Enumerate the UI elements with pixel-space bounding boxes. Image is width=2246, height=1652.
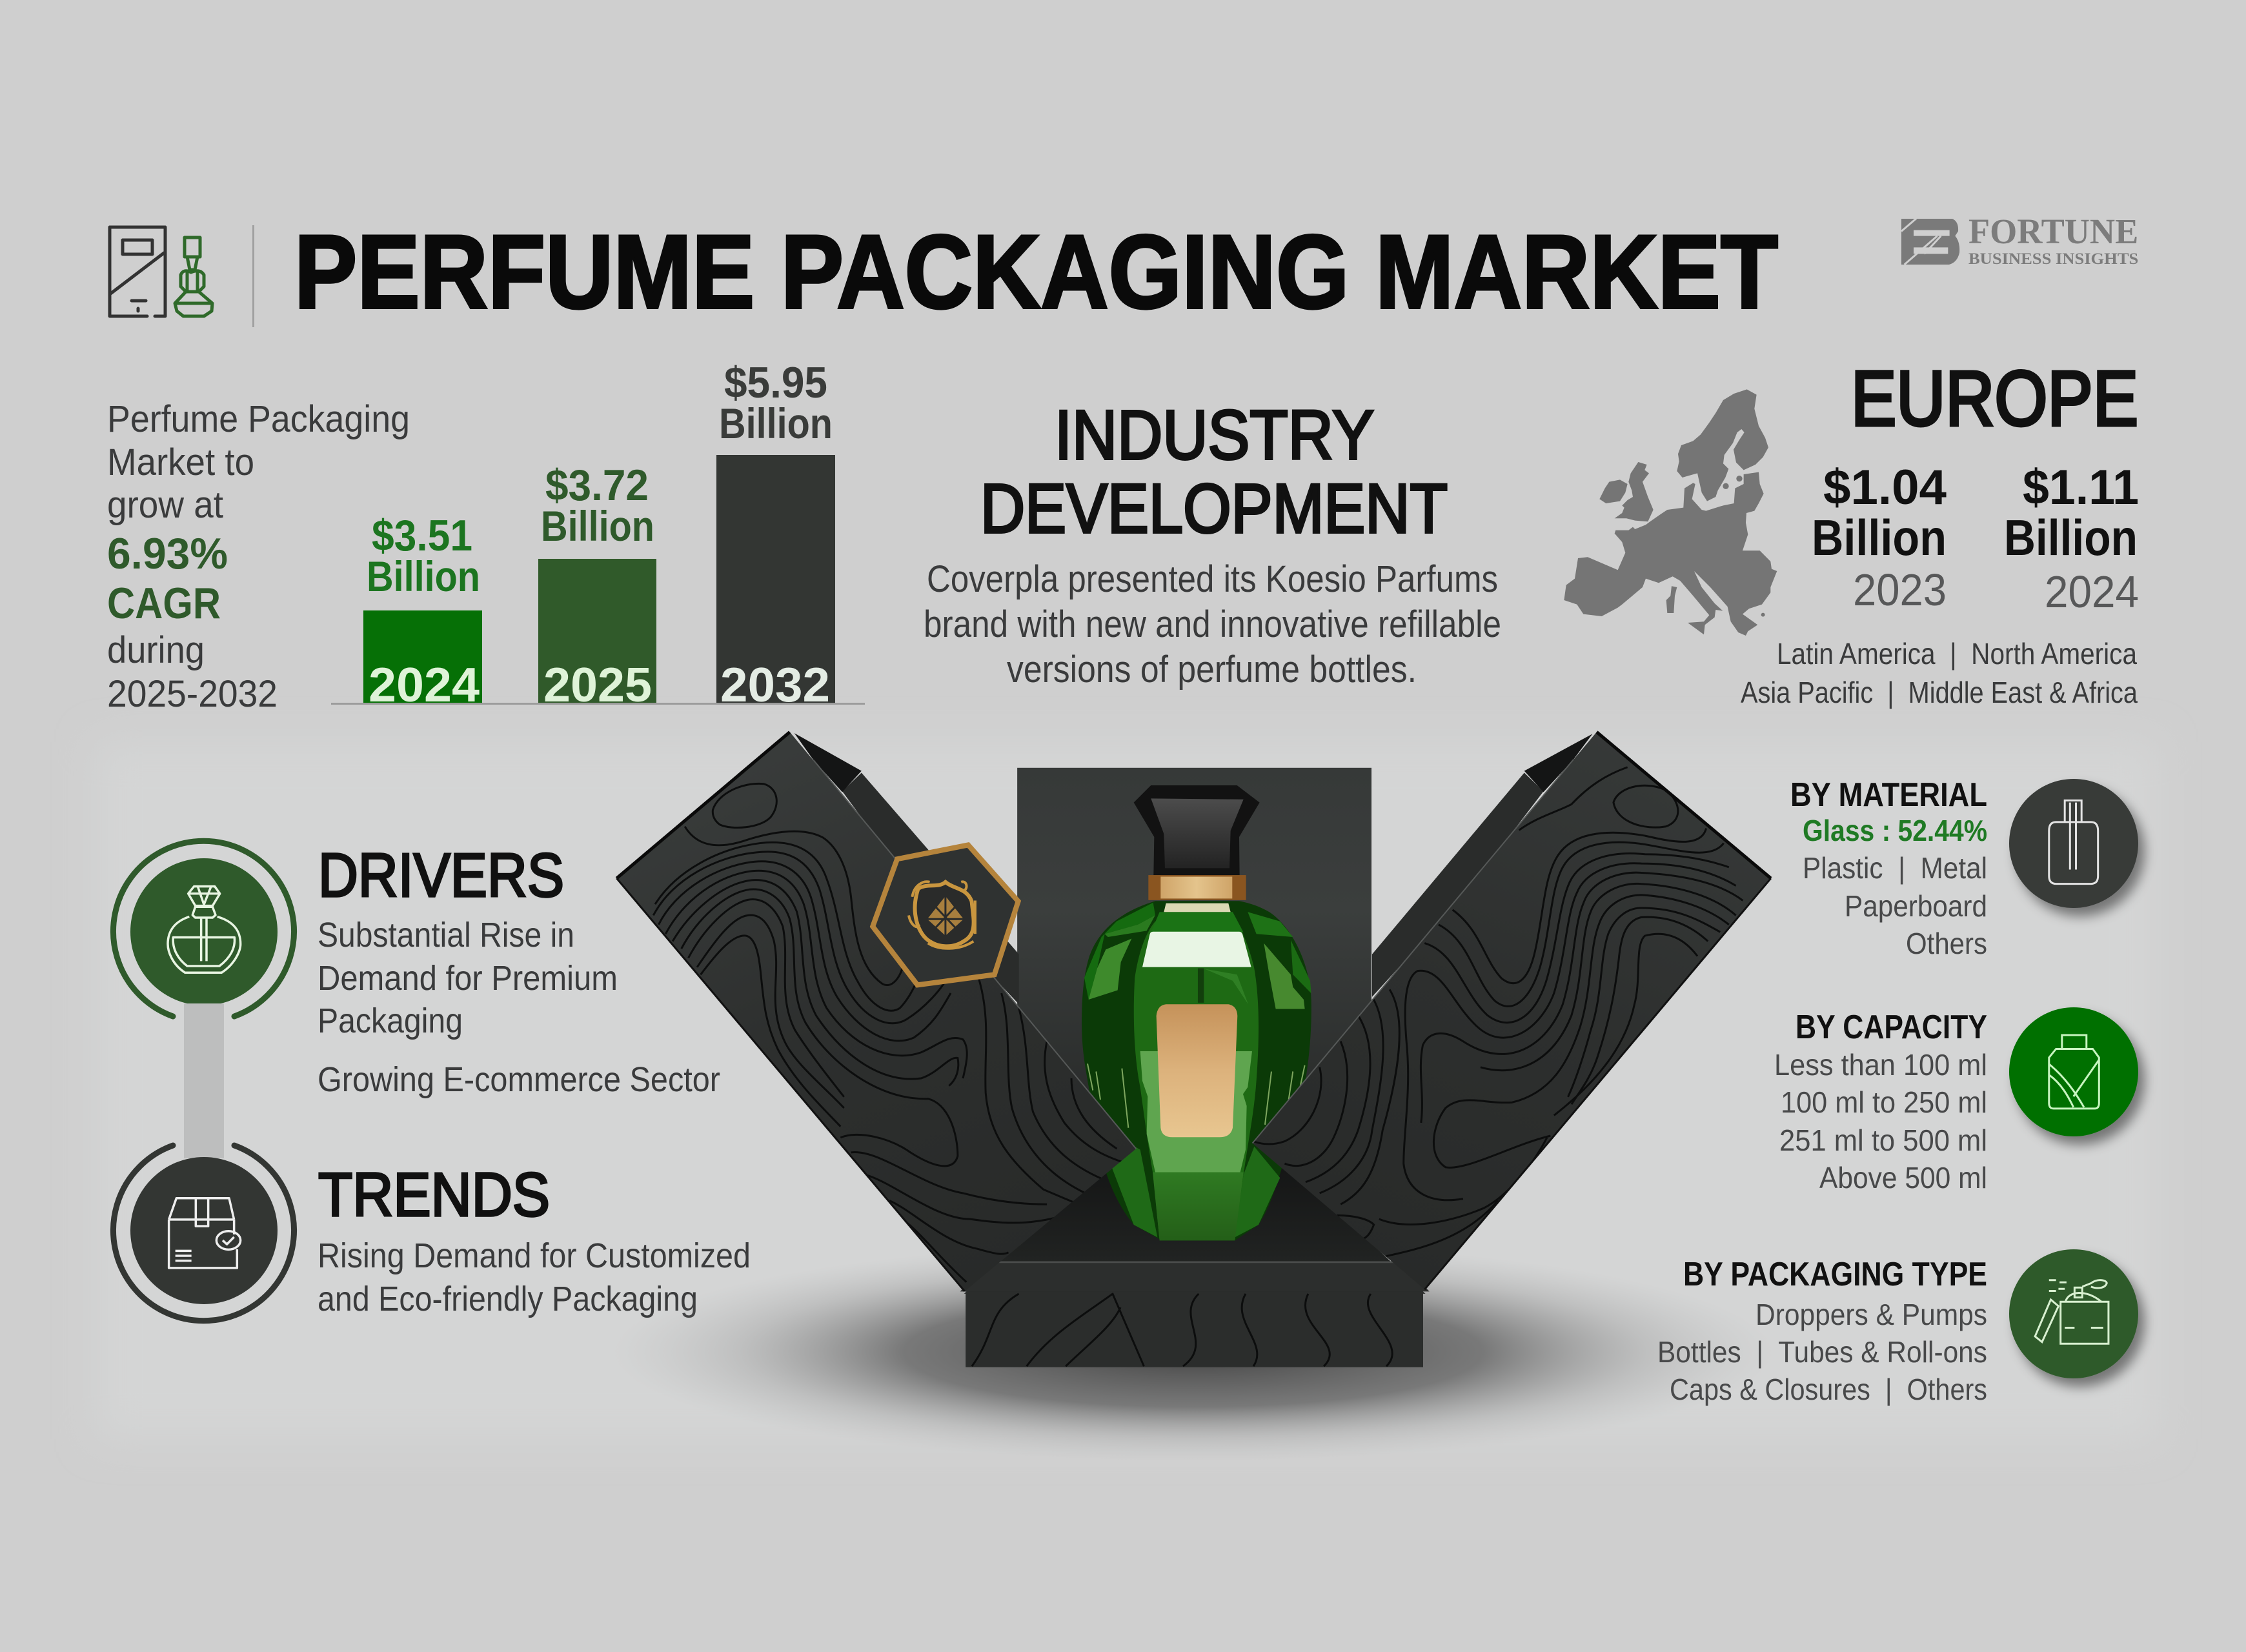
industry development text: versions of perfume bottles. [1007, 649, 1417, 690]
infographic canvas [108, 219, 2151, 1448]
CAGR text block [107, 398, 410, 715]
box base [966, 1291, 1423, 1367]
by capacity: Above 500 ml [1819, 1161, 1987, 1194]
by packaging type: BY PACKAGING TYPE [1683, 1256, 1987, 1293]
by capacity: 100 ml to 250 ml [1781, 1085, 1987, 1119]
bar 2025: Billion [541, 502, 654, 550]
europe value 2024: Billion [2004, 509, 2138, 566]
trends icon [114, 1145, 294, 1321]
icon: capacity bottle [2009, 1007, 2138, 1136]
bottle [1082, 785, 1311, 1240]
title: PERFUME PACKAGING MARKET [294, 214, 1778, 330]
europe value 2023: Billion [1812, 509, 1947, 566]
by capacity [1774, 1009, 1987, 1194]
by material: Glass : 52.44% [1803, 814, 1987, 847]
CAGR text block: 6.93% [107, 529, 228, 578]
industry development heading [980, 396, 1448, 547]
bar 2024: 2024 [369, 658, 480, 712]
by material [1790, 776, 1987, 960]
by packaging type: Bottles | Tubes & Roll-ons [1657, 1335, 1987, 1369]
by packaging type: Caps & Closures | Others [1670, 1373, 1987, 1406]
gold label [1157, 1004, 1237, 1137]
by packaging type [1657, 1256, 1987, 1406]
CAGR text block: Market to [107, 441, 254, 483]
drivers text: Growing E-commerce Sector [318, 1060, 720, 1099]
drivers text: Substantial Rise in [318, 916, 574, 954]
bar 2024: $3.51 [372, 511, 472, 560]
drivers text [318, 841, 720, 1099]
industry development text: brand with new and innovative refillable [924, 603, 1501, 645]
trends text: TRENDS [318, 1160, 550, 1229]
logo: Fortune Business Insights: BUSINESS INSIGHTS [1968, 250, 2138, 268]
by capacity: 251 ml to 500 ml [1779, 1123, 1987, 1157]
by material: BY MATERIAL [1790, 776, 1987, 814]
europe value 2023 [1812, 460, 1947, 615]
header icon: box and perfume bottle [110, 227, 212, 316]
by material: Plastic | Metal [1803, 851, 1987, 885]
header divider [252, 225, 254, 327]
industry development text: Coverpla presented its Koesio Parfums [927, 558, 1498, 600]
hexagon badge [873, 845, 1018, 985]
bar 2025: 2025 [543, 658, 652, 712]
europe value 2024: $1.11 [2023, 460, 2139, 515]
industry development heading: INDUSTRY [1055, 396, 1374, 474]
europe value 2024: 2024 [2045, 567, 2139, 617]
CAGR text block: during [107, 629, 205, 671]
by material: Others [1906, 927, 1987, 960]
perfume box with bottle [616, 732, 1771, 1367]
CAGR text block: grow at [107, 484, 223, 526]
icon: material bottle [2009, 779, 2138, 908]
CAGR text block: Perfume Packaging [107, 398, 410, 440]
by capacity: BY CAPACITY [1796, 1009, 1987, 1046]
other regions [1741, 637, 2138, 709]
bar 2032: 2032 [720, 658, 830, 712]
by packaging type: Droppers & Pumps [1755, 1298, 1987, 1331]
gold collar [1148, 875, 1246, 900]
icon: spray bottle and cap [2009, 1249, 2138, 1378]
industry development text [924, 558, 1501, 690]
bar 2025: $3.72 [545, 461, 649, 510]
drivers text: DRIVERS [318, 841, 564, 910]
drivers text: Packaging [318, 1002, 463, 1040]
industry development heading: DEVELOPMENT [980, 469, 1448, 547]
drivers icon [114, 841, 294, 1016]
europe value 2023: $1.04 [1823, 460, 1947, 515]
by material: Paperboard [1845, 889, 1987, 923]
bar 2025 [538, 461, 656, 712]
connector [184, 1003, 224, 1158]
europe value 2023: 2023 [1853, 565, 1947, 615]
right flap [1253, 732, 1771, 1289]
bottle cap [1134, 785, 1260, 875]
logo: Fortune Business Insights [1901, 212, 2138, 268]
europe map [1564, 389, 1777, 636]
other regions: Asia Pacific | Middle East & Africa [1741, 676, 2138, 709]
other regions: Latin America | North America [1777, 637, 2137, 670]
bar 2032 [716, 358, 835, 712]
bar chart [331, 358, 865, 712]
bar 2024 [363, 511, 482, 712]
box shadow [612, 1242, 1774, 1462]
by capacity: Less than 100 ml [1774, 1048, 1987, 1082]
left flap [616, 732, 1136, 1291]
trends text [318, 1160, 751, 1318]
logo: Fortune Business Insights: FORTUNE [1968, 212, 2138, 251]
trends text: Rising Demand for Customized [318, 1236, 751, 1275]
europe value 2024 [2004, 460, 2139, 617]
CAGR text block: CAGR [107, 579, 221, 628]
back panel and well [960, 768, 1430, 1294]
bar 2032: $5.95 [724, 358, 827, 407]
drivers text: Demand for Premium [318, 959, 618, 998]
europe heading: EUROPE [1851, 354, 2138, 442]
CAGR text block: 2025-2032 [107, 673, 278, 715]
bar 2024: Billion [367, 552, 480, 600]
bar 2032: Billion [719, 399, 833, 447]
trends text: and Eco-friendly Packaging [318, 1280, 698, 1318]
